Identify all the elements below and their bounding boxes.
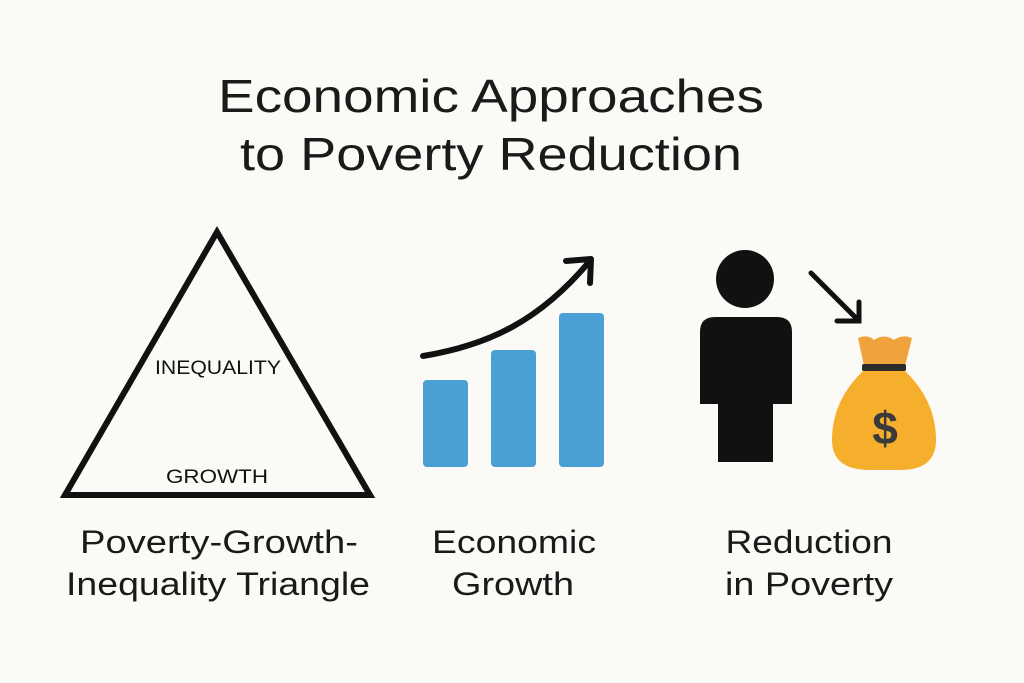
caption: poverty: in Poverty bbox=[725, 566, 893, 602]
caption: triangle: Poverty-Growth- bbox=[80, 524, 358, 560]
caption: poverty bbox=[725, 524, 893, 602]
icon: triangle bbox=[65, 232, 370, 495]
triangle label inequality: INEQUALITY bbox=[155, 358, 281, 379]
panel: triangle bbox=[65, 232, 370, 495]
arrow: down bbox=[811, 273, 859, 321]
caption: growth: Economic bbox=[432, 524, 596, 560]
title: Economic Approaches bbox=[218, 70, 764, 122]
icon: person bbox=[700, 250, 792, 462]
caption: poverty: Reduction bbox=[726, 524, 892, 560]
title bbox=[218, 70, 764, 180]
title: to Poverty Reduction bbox=[240, 128, 742, 180]
caption: triangle bbox=[66, 524, 370, 602]
bar chart bbox=[423, 313, 604, 467]
triangle label growth: GROWTH bbox=[166, 467, 268, 488]
icon: money bag: $ bbox=[872, 402, 898, 454]
caption: growth bbox=[432, 524, 596, 602]
caption: growth: Growth bbox=[452, 566, 574, 602]
arrow: growth curve bbox=[423, 259, 591, 356]
caption: triangle: Inequality Triangle bbox=[66, 566, 370, 602]
icon: money bag bbox=[832, 336, 936, 470]
